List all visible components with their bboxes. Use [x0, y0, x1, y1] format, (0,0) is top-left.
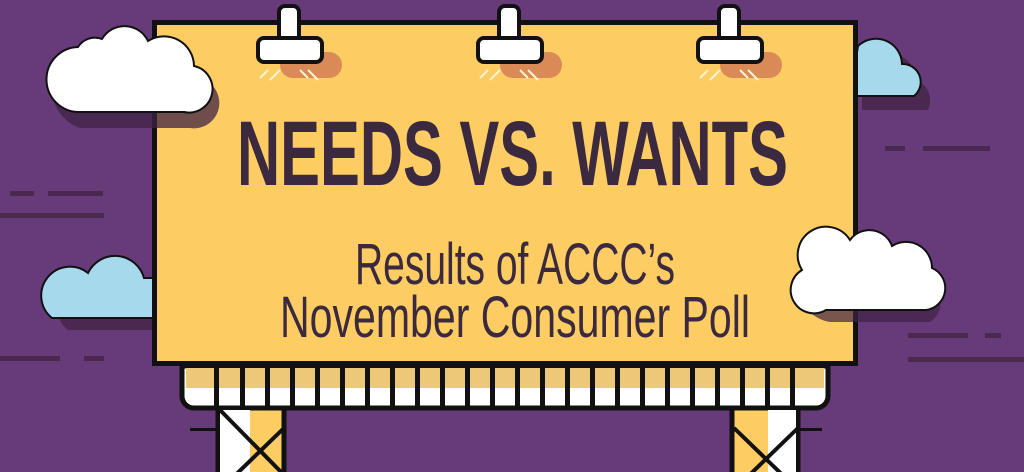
cloud: right white	[791, 227, 945, 322]
subtitle	[280, 232, 750, 350]
cloud: left blue (behind board)	[41, 256, 168, 330]
clamps	[258, 6, 782, 80]
subtitle: Results of ACCC’s	[355, 232, 675, 297]
left post	[190, 408, 284, 472]
cloud: right blue (behind board)	[850, 39, 930, 110]
cloud: top-left white	[46, 26, 219, 128]
right post	[732, 408, 822, 472]
subtitle: November Consumer Poll	[280, 285, 750, 350]
billboard panel	[154, 22, 856, 364]
billboard walkway	[182, 366, 828, 408]
